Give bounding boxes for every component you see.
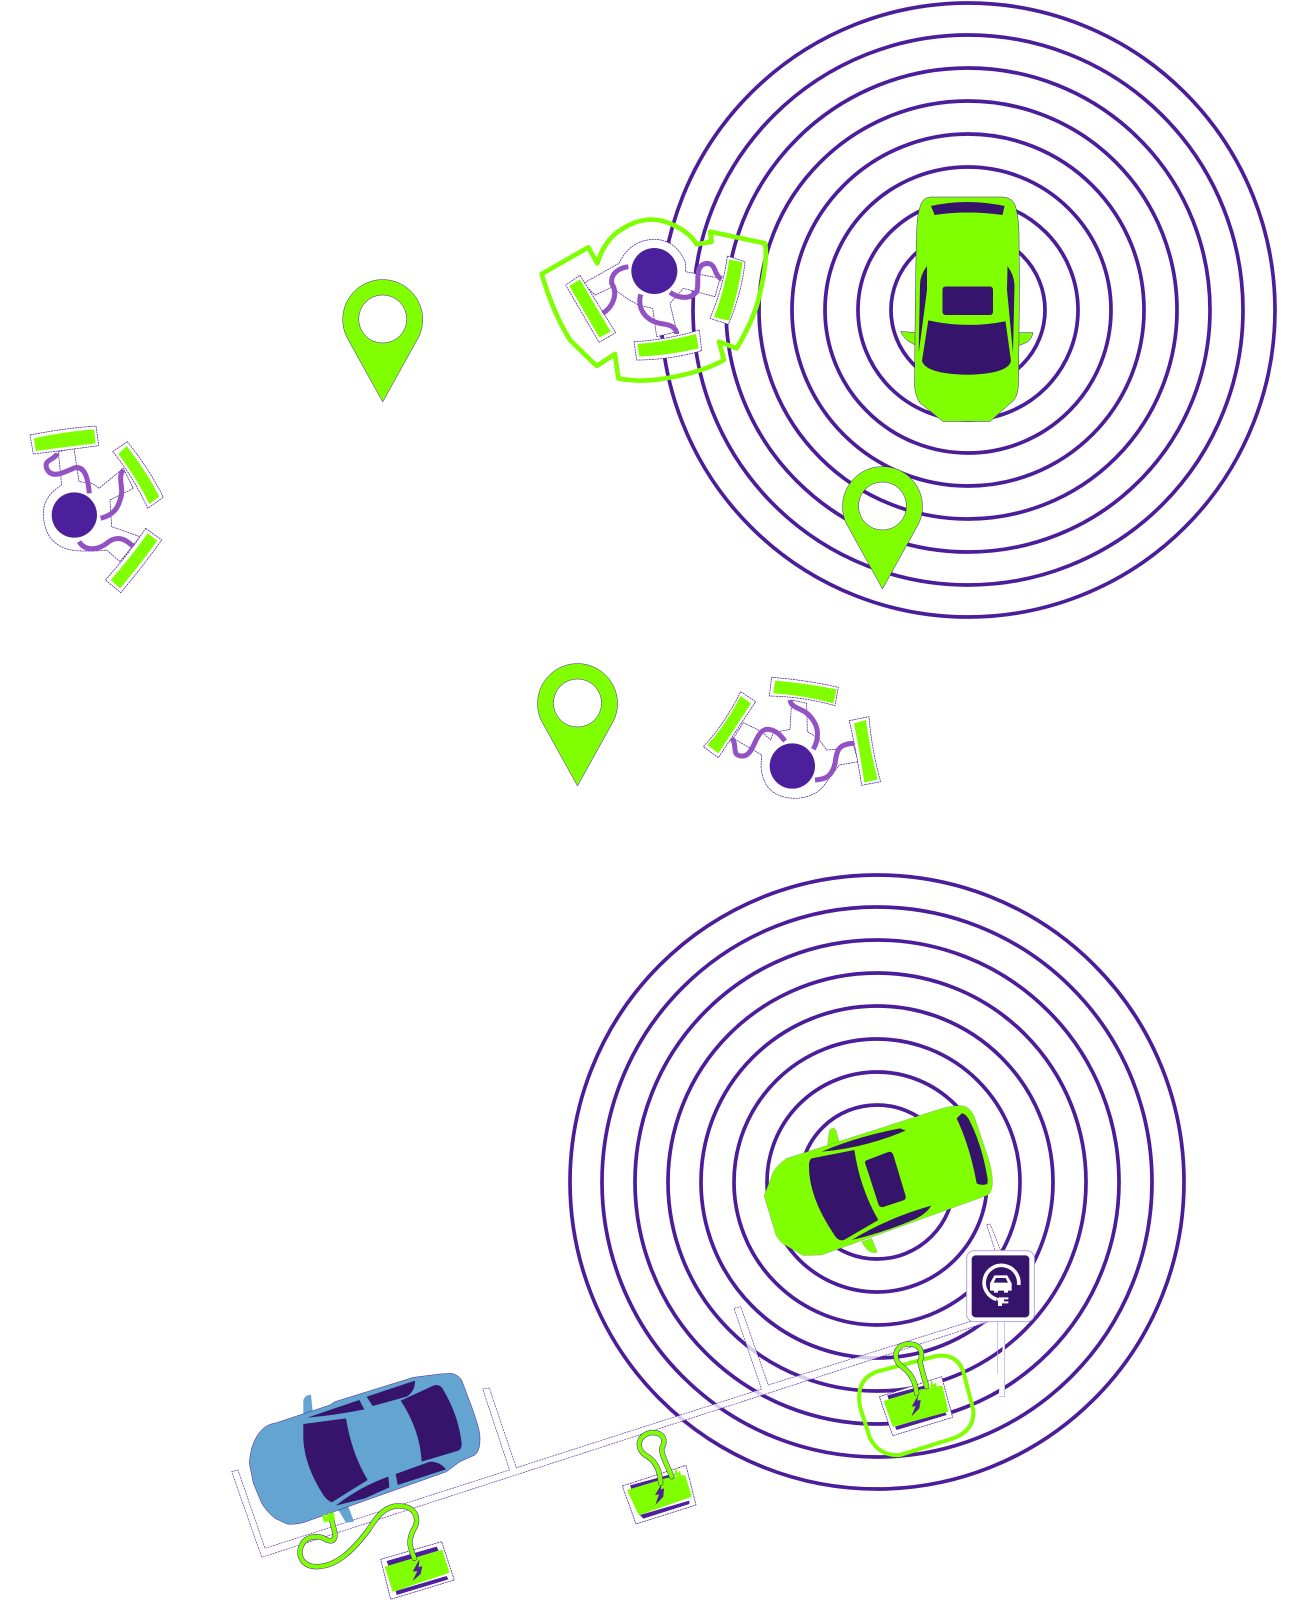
signal rings: bottom car	[570, 875, 1184, 1489]
bars	[569, 259, 743, 357]
white halo	[566, 239, 745, 360]
green highlight outline	[542, 220, 766, 381]
charging station sign	[967, 1251, 1034, 1397]
charging unit: highlighted	[859, 1344, 973, 1455]
hub	[770, 743, 815, 789]
sign plate	[967, 1251, 1034, 1322]
highlighted sensor hub with green outline	[542, 220, 766, 381]
cable	[896, 1344, 927, 1393]
sensor hub: left	[30, 426, 163, 593]
cable	[639, 1433, 672, 1483]
wires	[603, 263, 722, 334]
map pin: centre	[538, 664, 618, 786]
outlines	[30, 426, 163, 593]
hub	[631, 248, 677, 294]
unit halo	[879, 1377, 953, 1436]
charging unit: middle	[622, 1433, 696, 1524]
bars	[34, 429, 159, 588]
charging unit: blue car	[300, 1506, 454, 1599]
battery	[885, 1379, 947, 1430]
unit halo	[622, 1465, 696, 1524]
blue car parked	[249, 1373, 480, 1524]
sign pole	[997, 1322, 1005, 1397]
signal rings: top car	[661, 3, 1275, 617]
outlines	[703, 677, 881, 798]
green car rotated	[764, 1106, 992, 1256]
parking bay lines	[232, 1224, 1003, 1557]
charging car icon	[984, 1265, 1019, 1306]
cable with plug	[300, 1506, 417, 1567]
battery	[386, 1547, 448, 1595]
bars	[707, 681, 878, 783]
battery	[628, 1467, 691, 1519]
sensor hub: centre right	[703, 677, 881, 798]
green highlight outline	[859, 1356, 973, 1455]
unit halo	[381, 1542, 454, 1599]
hub	[52, 492, 97, 538]
green car top view	[901, 197, 1033, 422]
map pin: upper left	[343, 280, 423, 402]
map pin: inside rings	[842, 467, 922, 589]
wires	[732, 700, 854, 780]
wires	[46, 453, 133, 549]
